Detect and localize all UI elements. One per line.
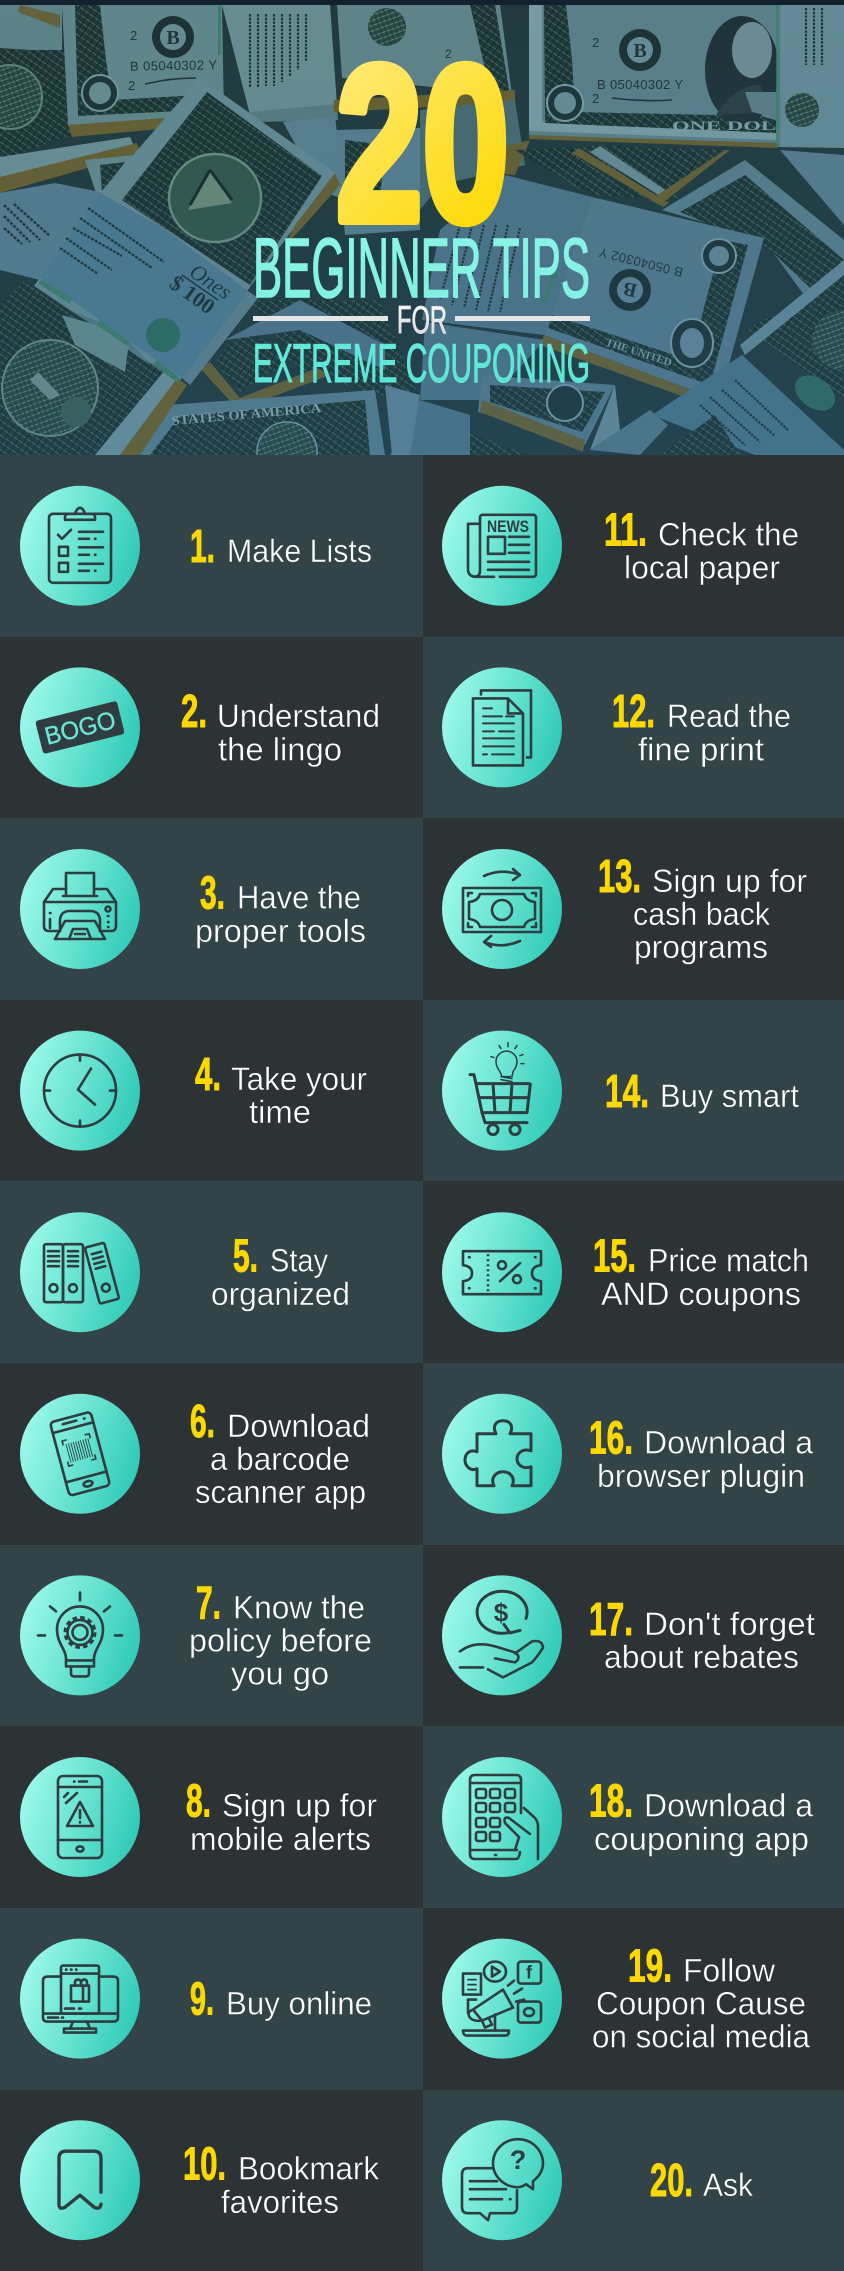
tip text: local paper bbox=[624, 550, 780, 586]
panel: tip 10 bbox=[0, 2090, 423, 2271]
tip text: proper tools bbox=[195, 913, 366, 949]
icon: gear bulb bbox=[38, 1592, 122, 1676]
hero: dollar bills photo background: B 05040302 Y bbox=[130, 57, 218, 74]
panel: tip 18 bbox=[423, 1726, 844, 1908]
tip text bbox=[186, 1774, 377, 1857]
icon: tablet with hand bbox=[470, 1775, 538, 1859]
icon: chat bubbles bbox=[462, 2139, 543, 2220]
tip text bbox=[589, 1411, 813, 1494]
panel: tip 20 bbox=[423, 2090, 844, 2271]
icon: coupon ticket bbox=[463, 1251, 541, 1294]
icon: monitor with shop page bbox=[43, 1966, 118, 2033]
panel: tip 3 bbox=[0, 818, 423, 1000]
hero: dollar bills photo background: 2 bbox=[445, 47, 452, 61]
panel: tip 6 bbox=[0, 1363, 423, 1545]
title bbox=[253, 20, 590, 394]
tip text: organized bbox=[211, 1276, 350, 1312]
tip text: on social media bbox=[592, 2019, 810, 2055]
icon: social media megaphone bbox=[463, 1962, 541, 2036]
tip text bbox=[190, 1973, 372, 2025]
tip text: 9. bbox=[190, 1973, 214, 2025]
heading: for: FOR bbox=[397, 299, 447, 342]
tip text bbox=[211, 1230, 350, 1312]
hero: dollar bills photo background: STATES OF AMERICA bbox=[171, 400, 322, 428]
tip text: 19. bbox=[628, 1940, 672, 1992]
tip text: 16. bbox=[589, 1411, 633, 1463]
icon: documents bbox=[473, 690, 531, 765]
icon: newspaper: NEWS bbox=[487, 518, 529, 536]
tip text: 8. bbox=[186, 1774, 211, 1826]
panel: tip 1 bbox=[0, 455, 423, 637]
tip text: favorites bbox=[221, 2184, 339, 2220]
panel: tip 15 bbox=[423, 1181, 844, 1363]
tip text: Bookmark bbox=[238, 2151, 380, 2187]
divider right bbox=[455, 316, 590, 321]
tip text bbox=[189, 1576, 372, 1692]
tip text: fine print bbox=[638, 732, 764, 768]
tip text bbox=[589, 1593, 815, 1675]
tip text: Make Lists bbox=[227, 533, 372, 569]
tip text: 20. bbox=[650, 2154, 693, 2206]
tip text: 2. bbox=[181, 685, 207, 737]
tip text: about rebates bbox=[604, 1639, 799, 1675]
tip text: Have the bbox=[237, 880, 361, 916]
hero: dollar bills photo background: THE UNITED bbox=[604, 336, 673, 369]
tip text: Download a bbox=[644, 1788, 813, 1824]
tip text bbox=[195, 1048, 367, 1130]
panel: tip 4 bbox=[0, 1000, 423, 1181]
icon: clipboard bbox=[49, 508, 111, 583]
hero: dollar bills photo background bbox=[0, 0, 844, 482]
hero: dollar bills photo background: B 05040302 Y bbox=[597, 77, 683, 92]
icon: printer bbox=[44, 873, 116, 939]
tip text: Understand bbox=[217, 698, 380, 734]
tip text: Follow bbox=[683, 1953, 776, 1989]
hero: dollar bills photo background: 2 bbox=[128, 78, 135, 93]
tip text bbox=[183, 2138, 380, 2220]
tip text bbox=[592, 1940, 810, 2055]
icon: barcode phone bbox=[50, 1412, 110, 1496]
panel: tip 7 bbox=[0, 1545, 423, 1726]
hero: dollar bills photo background: B bbox=[633, 40, 647, 62]
icon: puzzle piece bbox=[465, 1421, 531, 1486]
icon: hand with coin bbox=[460, 1591, 543, 1677]
tip text: 14. bbox=[605, 1065, 649, 1117]
tip text: the lingo bbox=[218, 732, 342, 768]
hero: dollar bills photo background: B 05040302 Y bbox=[597, 245, 684, 280]
icon: bookmark bbox=[59, 2151, 101, 2208]
panel: tip 13 bbox=[423, 818, 844, 1000]
tip text bbox=[612, 685, 791, 768]
hero: dollar bills photo background: 2 bbox=[592, 35, 599, 50]
panel: tip 2 bbox=[0, 637, 423, 818]
icon: cash back bbox=[463, 869, 541, 947]
tip text bbox=[598, 850, 807, 965]
hero: dollar bills photo background: $ 100 bbox=[165, 270, 220, 319]
divider left bbox=[253, 316, 388, 321]
tip text: 5. bbox=[233, 1230, 258, 1282]
hero: dollar bills photo background: B bbox=[621, 277, 639, 301]
tip text bbox=[589, 1774, 813, 1857]
tip text: Download bbox=[227, 1408, 370, 1444]
tip text: 4. bbox=[195, 1048, 221, 1100]
tip text bbox=[181, 685, 380, 768]
tip text bbox=[604, 503, 799, 586]
tip text: 6. bbox=[190, 1395, 215, 1447]
tip text: time bbox=[249, 1094, 311, 1130]
tip text: scanner app bbox=[195, 1474, 366, 1510]
big number 20: 20 bbox=[336, 20, 509, 267]
icon: hand with coin: $ bbox=[494, 1597, 509, 1627]
icon: cart with bulb bbox=[470, 1043, 530, 1135]
tip text: cash back bbox=[633, 896, 771, 932]
panel: tip 17 bbox=[423, 1545, 844, 1726]
hero: dollar bills photo background: 2 bbox=[592, 91, 599, 106]
panel: tip 8 bbox=[0, 1726, 423, 1908]
panel: tip 14 bbox=[423, 1000, 844, 1181]
tip text: Ask bbox=[703, 2167, 754, 2203]
tip text: Stay bbox=[270, 1243, 328, 1279]
tip text bbox=[190, 1395, 370, 1510]
panel: tip 19 bbox=[423, 1908, 844, 2090]
tip text: AND coupons bbox=[601, 1276, 801, 1312]
icon: chat bubbles: ? bbox=[510, 2145, 526, 2175]
panel: tip 16 bbox=[423, 1363, 844, 1545]
panel: tip 12 bbox=[423, 637, 844, 818]
tip text: 1. bbox=[190, 520, 215, 572]
icon: phone alert bbox=[58, 1776, 102, 1858]
icon: BOGO stamp: BOGO bbox=[42, 706, 119, 751]
tip text: Download a bbox=[644, 1424, 813, 1460]
panel: tip 9 bbox=[0, 1908, 423, 2090]
tip text: Buy online bbox=[226, 1986, 372, 2022]
panel: tip 5 bbox=[0, 1181, 423, 1363]
tip text: Coupon Cause bbox=[596, 1986, 806, 2022]
tip text: mobile alerts bbox=[190, 1821, 371, 1857]
tip text bbox=[190, 520, 372, 572]
tip text: 3. bbox=[200, 866, 225, 918]
tip text: programs bbox=[634, 929, 768, 965]
tip text bbox=[650, 2154, 754, 2206]
icon: clock bbox=[44, 1055, 116, 1127]
tip text bbox=[605, 1065, 799, 1117]
tip text: you go bbox=[231, 1656, 329, 1692]
hero: dollar bills photo background: 2 bbox=[130, 28, 137, 43]
tip text: 11. bbox=[604, 503, 647, 555]
tip text: 12. bbox=[612, 685, 655, 737]
hero: dollar bills photo background: ONE DOL bbox=[672, 119, 776, 133]
tip text: a barcode bbox=[210, 1441, 350, 1477]
tip text: 18. bbox=[589, 1774, 633, 1826]
hero: dollar bills photo background: Ones bbox=[185, 258, 237, 304]
tip text: Check the bbox=[658, 516, 799, 552]
icon: binders bbox=[44, 1243, 119, 1304]
tip text: browser plugin bbox=[597, 1458, 805, 1494]
tip text: 10. bbox=[183, 2138, 226, 2190]
tip text: policy before bbox=[189, 1622, 372, 1658]
tip text: Sign up for bbox=[652, 863, 807, 899]
tip text bbox=[593, 1230, 809, 1312]
tip text: Buy smart bbox=[660, 1078, 799, 1114]
tip text: 13. bbox=[598, 850, 641, 902]
tip text: Know the bbox=[233, 1590, 365, 1626]
tip text: Don't forget bbox=[644, 1606, 815, 1642]
tip text: 7. bbox=[196, 1576, 221, 1628]
panel: tip 11 bbox=[423, 455, 844, 637]
tip text bbox=[195, 866, 366, 949]
tip text: 15. bbox=[593, 1230, 636, 1282]
tip text: Read the bbox=[667, 698, 791, 734]
icon: social media megaphone: f bbox=[526, 1963, 533, 1983]
tip text: couponing app bbox=[594, 1821, 809, 1857]
tip text: Price match bbox=[648, 1243, 809, 1279]
tip text: Sign up for bbox=[222, 1788, 377, 1824]
tip text: 17. bbox=[589, 1593, 633, 1645]
hero: dollar bills photo background: B bbox=[166, 27, 180, 49]
icon: newspaper bbox=[468, 515, 536, 577]
tip text: Take your bbox=[231, 1061, 367, 1097]
